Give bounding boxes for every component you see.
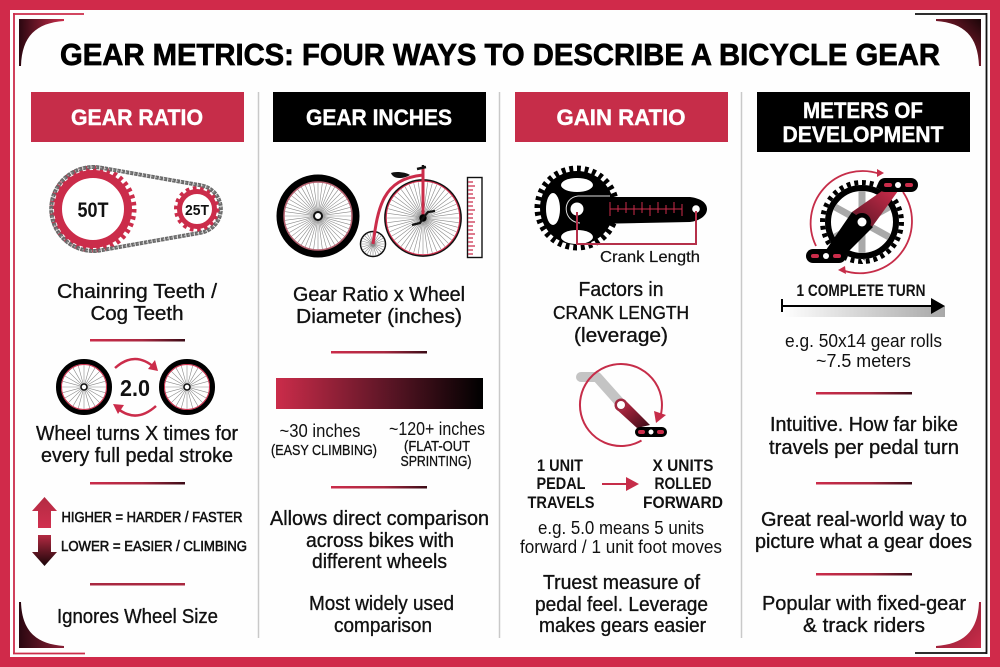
icon: chainring and cog with chain: 25T xyxy=(185,202,209,219)
text: formula xyxy=(57,281,217,325)
text: real-world: Great real-world way to xyxy=(761,509,967,531)
text: example: forward / 1 unit foot moves xyxy=(520,537,722,557)
icon: up arrow xyxy=(32,497,57,528)
text: real-world: picture what a gear does xyxy=(755,531,972,553)
text: x units xyxy=(643,457,723,512)
text: example xyxy=(520,518,722,557)
text: x units: FORWARD xyxy=(643,494,723,512)
text: comparison: across bikes with xyxy=(306,530,454,552)
label: high end: SPRINTING) xyxy=(400,453,472,470)
text: wheel turns xyxy=(36,423,238,467)
heading: gear inches: GEAR INCHES xyxy=(306,105,452,130)
heading: gear ratio: GEAR RATIO xyxy=(71,105,203,130)
icon: chainring and cog with chain xyxy=(51,167,221,251)
panel: gear inches xyxy=(270,92,489,637)
icon: two wheels with 2.0 xyxy=(58,359,212,416)
text: intuitive xyxy=(769,414,959,459)
label: high end xyxy=(389,419,485,470)
arrow: distance xyxy=(782,298,945,317)
text: lower: LOWER = EASIER / CLIMBING xyxy=(61,538,247,555)
heading: gain ratio: GAIN RATIO xyxy=(556,105,686,130)
label: complete turn: 1 COMPLETE TURN xyxy=(796,282,926,300)
icon: penny-farthing xyxy=(360,165,463,258)
text: higher: HIGHER = HARDER / FASTER xyxy=(62,509,243,526)
text: truest measure: Truest measure of xyxy=(543,572,700,594)
text: 1 unit: 1 UNIT xyxy=(537,457,583,475)
label: low end: ~30 inches xyxy=(280,421,360,441)
text: formula: Chainring Teeth / xyxy=(57,281,217,303)
label: low end: (EASY CLIMBING) xyxy=(271,442,377,459)
text: x units: X UNITS xyxy=(652,457,714,475)
text: 1 unit xyxy=(528,457,594,512)
icon: road wheel xyxy=(280,178,356,254)
text: truest measure: pedal feel. Leverage xyxy=(535,594,708,616)
text: 1 unit: TRAVELS xyxy=(528,494,594,512)
text: example: e.g. 5.0 means 5 units xyxy=(538,518,704,538)
label: crank length: Crank Length xyxy=(600,249,700,266)
text: formula xyxy=(293,284,465,328)
icon: down arrow xyxy=(32,535,57,566)
gradient scale bar xyxy=(276,378,483,409)
panel: gain ratio xyxy=(515,92,728,637)
text: truest measure xyxy=(535,572,708,637)
heading: gear ratio xyxy=(31,92,244,142)
label: high end: ~120+ inches xyxy=(389,419,485,439)
text: factors: CRANK LENGTH xyxy=(553,303,689,323)
panel: gear ratio xyxy=(31,92,247,628)
text: real-world xyxy=(755,509,972,553)
text: truest measure: makes gears easier xyxy=(539,615,706,637)
icon: ruler xyxy=(468,178,482,258)
text: formula: Gear Ratio x Wheel xyxy=(293,284,465,306)
label: low end xyxy=(271,421,377,459)
label: high end: (FLAT-OUT xyxy=(404,438,470,455)
text: example xyxy=(785,331,942,371)
text: x units: ROLLED xyxy=(654,475,712,493)
text: most used: Most widely used xyxy=(309,593,454,615)
text: comparison: Allows direct comparison xyxy=(270,508,489,530)
text: wheel turns: Wheel turns X times for xyxy=(36,423,238,445)
text: popular: Popular with fixed-gear xyxy=(762,593,966,615)
heading: gain ratio xyxy=(515,92,728,142)
heading: meters of development xyxy=(757,92,970,152)
panel: meters of development xyxy=(755,92,972,637)
text: wheel turns: every full pedal stroke xyxy=(41,445,233,467)
heading: meters of development: METERS OF xyxy=(803,98,923,123)
title: GEAR METRICS: FOUR WAYS TO DESCRIBE A BICYCLE GEAR xyxy=(60,37,940,72)
heading: gear inches xyxy=(273,92,486,142)
icon: pedal travel circle xyxy=(580,364,667,446)
arrow: unit to units xyxy=(602,477,639,491)
text: popular: & track riders xyxy=(803,615,925,637)
text: most used: comparison xyxy=(334,615,432,637)
text: example: e.g. 50x14 gear rolls xyxy=(785,331,942,351)
text: 1 unit: PEDAL xyxy=(536,475,586,493)
text: factors xyxy=(553,279,689,347)
text: factors: Factors in xyxy=(578,279,664,301)
heading: meters of development: DEVELOPMENT xyxy=(782,122,944,147)
text: comparison: different wheels xyxy=(312,551,447,573)
text: formula: Diameter (inches) xyxy=(296,306,462,328)
icon: chainring and crank xyxy=(538,169,707,247)
icon: two wheels with 2.0: 2.0 xyxy=(120,375,150,401)
text: intuitive: Intuitive. How far bike xyxy=(770,414,958,436)
icon: crankset one turn xyxy=(806,169,918,274)
icon: chainring and cog with chain: 50T xyxy=(78,199,109,222)
text: ignores wheel size: Ignores Wheel Size xyxy=(57,606,218,628)
text: factors: (leverage) xyxy=(574,325,668,347)
text: intuitive: travels per pedal turn xyxy=(769,437,959,459)
text: example: ~7.5 meters xyxy=(816,351,911,371)
text: formula: Cog Teeth xyxy=(90,303,184,325)
text: popular xyxy=(762,593,966,637)
text: comparison xyxy=(270,508,489,573)
text: most used xyxy=(309,593,454,637)
